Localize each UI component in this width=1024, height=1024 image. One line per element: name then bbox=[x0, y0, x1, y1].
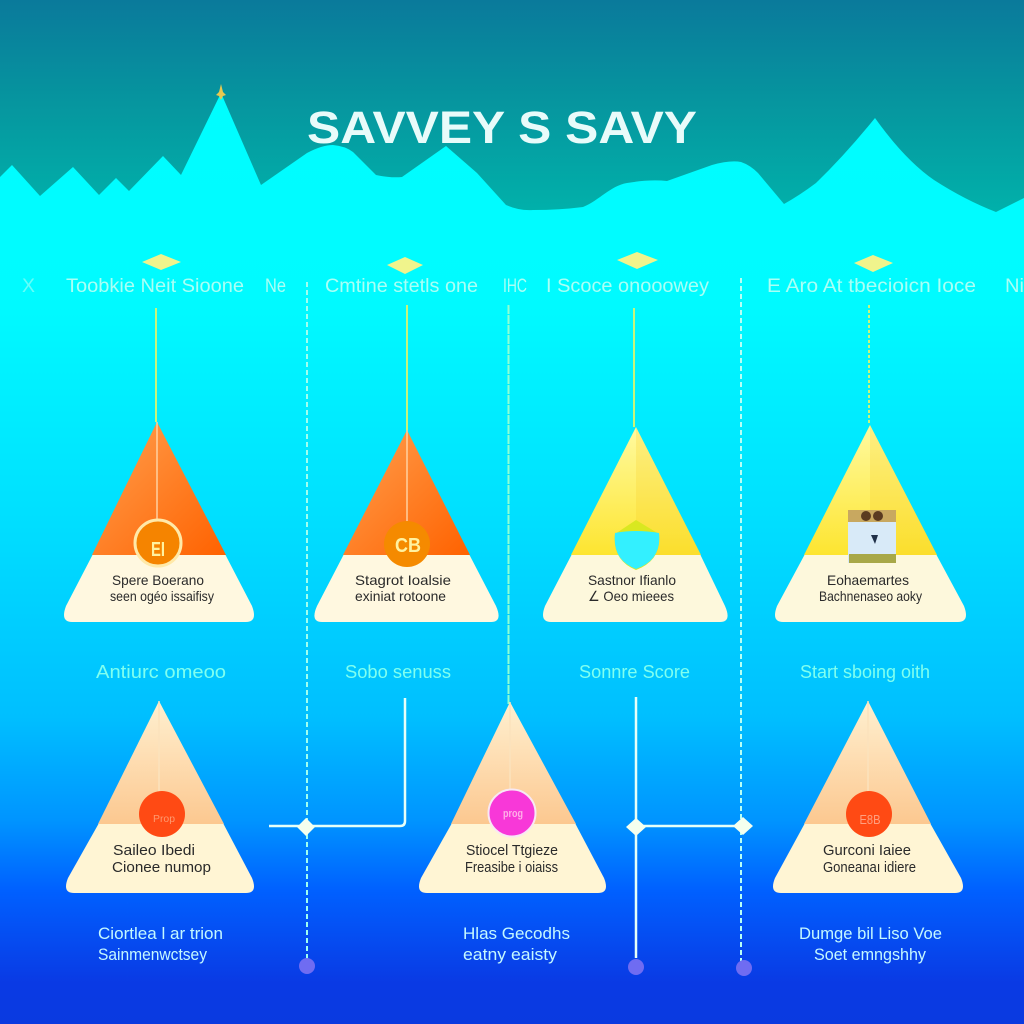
connector diamonds bbox=[297, 817, 753, 836]
column headings row: E Aro At tbecioicn Ioce bbox=[767, 276, 976, 297]
card 6 text: Freasibe i oiaiss bbox=[465, 860, 558, 876]
column captions: Antiurc omeoo bbox=[96, 662, 226, 682]
column captions: Sonnre Score bbox=[579, 662, 690, 682]
card 7 text bbox=[823, 843, 916, 876]
bottom captions: eatny eaisty bbox=[463, 945, 558, 964]
column captions: Start sboing oith bbox=[800, 662, 930, 682]
bottom captions bbox=[98, 924, 942, 964]
panel: card 1 bbox=[64, 422, 254, 622]
card 7 text: Gurconi Iaiee bbox=[823, 843, 911, 859]
card 1 text: seen ogéo issaifisy bbox=[110, 588, 214, 604]
card 2 text bbox=[355, 572, 451, 604]
column headings row: X bbox=[22, 276, 35, 297]
card 6 text: Stiocel Ttgieze bbox=[466, 843, 558, 859]
card 6 text bbox=[465, 843, 558, 876]
card 1 text bbox=[110, 572, 214, 604]
bottom captions: Sainmenwctsey bbox=[98, 945, 207, 964]
icon: badge 5 bbox=[139, 791, 185, 837]
panel: card 7 bbox=[773, 701, 963, 893]
column captions bbox=[96, 662, 930, 682]
card 4 text: Bachnenaseo aoky bbox=[819, 588, 922, 604]
icon: badge 6 bbox=[488, 790, 536, 836]
column headings row: Ne bbox=[265, 276, 286, 297]
background sky bbox=[0, 0, 1024, 230]
card 5 text bbox=[112, 843, 211, 876]
icon: badge 5: Prop bbox=[153, 814, 175, 825]
connector lines bbox=[156, 278, 869, 962]
icon: shield bbox=[615, 520, 659, 570]
panel: card 6 bbox=[419, 702, 606, 893]
column headings row: Ni bbox=[1005, 276, 1024, 297]
card 3 text bbox=[588, 572, 676, 604]
heading diamonds bbox=[142, 252, 893, 274]
bottom captions: Dumge bil Liso Voe bbox=[799, 924, 942, 943]
title: SAVVEY S SAVY bbox=[307, 102, 697, 153]
icon: badge 7: E8B bbox=[860, 812, 880, 827]
card 7 text: Goneanaı idiere bbox=[823, 860, 916, 876]
card 1 text: Spere Boerano bbox=[112, 572, 204, 588]
card 4 text: Eohaemartes bbox=[827, 572, 909, 588]
icon: badge 6: prog bbox=[503, 808, 523, 820]
column captions: Sobo senuss bbox=[345, 662, 451, 682]
column headings row: IHC bbox=[503, 276, 527, 297]
icon: badge 1 bbox=[135, 520, 181, 566]
column headings row: Cmtine stetls one bbox=[325, 276, 478, 297]
card 2 text: exiniat rotoone bbox=[355, 588, 446, 604]
card 3 text: ∠ Oeo mieees bbox=[588, 588, 674, 604]
card 5 text: Saileo Ibedi bbox=[113, 843, 195, 859]
panel: card 3 bbox=[543, 427, 728, 622]
connector end dots bbox=[299, 958, 752, 976]
icon: badge 2: CB bbox=[395, 535, 421, 557]
panel: card 5 bbox=[66, 701, 254, 893]
card 2 text: Stagrot Ioalsie bbox=[355, 572, 451, 588]
card 3 text: Sastnor Ifianlo bbox=[588, 572, 676, 588]
panel: card 4 bbox=[775, 425, 966, 622]
column headings row: Toobkie Neit Sioone bbox=[66, 276, 244, 297]
card 5 text: Cionee numop bbox=[112, 860, 211, 876]
bottom captions: Ciortlea l ar trion bbox=[98, 924, 223, 943]
bottom captions: Hlas Gecodhs bbox=[463, 924, 570, 943]
icon: badge 1: EI bbox=[151, 539, 165, 561]
bottom captions: Soet emngshhy bbox=[814, 945, 926, 964]
card 4 text bbox=[819, 572, 922, 604]
icon: peak star bbox=[216, 84, 226, 100]
panel: card 2 bbox=[314, 430, 499, 622]
column headings row: I Scoce onooowey bbox=[546, 276, 710, 297]
icon: badge 7 bbox=[846, 791, 892, 837]
icon: badge 2 bbox=[384, 521, 430, 567]
icon: calendar box bbox=[848, 510, 896, 563]
column headings row bbox=[22, 276, 1024, 297]
